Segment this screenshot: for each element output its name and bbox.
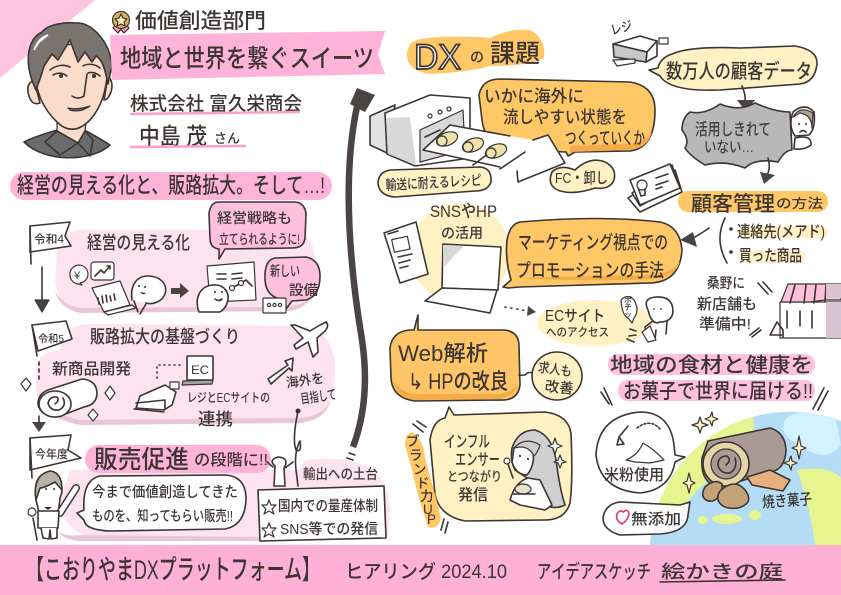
text: new store: 準備中! <box>699 316 751 333</box>
heading pill: DX <box>407 30 544 77</box>
icon: oven <box>370 95 470 166</box>
arrow: overseas <box>268 358 293 384</box>
flag <box>32 321 72 356</box>
icon: yen bubble <box>70 265 88 285</box>
label: FC: FC・卸し <box>555 170 608 187</box>
bubble: additive free <box>603 502 690 535</box>
list: customer management: 連絡先(メアド) <box>737 223 825 241</box>
cloud: not utilized <box>682 103 792 168</box>
figure: person with board <box>197 285 228 312</box>
callout: web analytics: Web解析 <box>398 341 488 366</box>
callout: influencer: 発信 <box>458 486 488 504</box>
company name: 株式会社 富久栄商会 <box>130 93 302 115</box>
bubble: click: ポチッ <box>624 296 632 319</box>
flag <box>30 222 71 264</box>
icon: laptop <box>425 244 501 313</box>
arrow: big curved <box>347 88 375 460</box>
label: brand power: ブランド力UP <box>406 433 436 527</box>
panel: 令和5 <box>21 321 337 429</box>
heading pill: DX: DX <box>414 38 461 77</box>
flag: 令和5 <box>38 332 64 345</box>
callout: strategy: 経営戦略も <box>217 210 292 226</box>
label: recruitment: 改善 <box>544 378 575 398</box>
caption: 連携 <box>198 410 233 429</box>
label: FC <box>550 160 615 192</box>
text: new store: 桑野に <box>707 275 745 291</box>
dotted arrow <box>505 306 536 316</box>
label: recipe <box>378 167 491 197</box>
icon: message box <box>263 298 286 313</box>
sparkles <box>21 378 115 421</box>
list: customer management <box>720 218 828 265</box>
caption: SNS: SNSやHP <box>430 202 497 221</box>
box: export foundation: SNS等での発信 <box>280 520 378 538</box>
callout: overseas distribution: いかに海外に <box>484 87 584 106</box>
label: EC access: へのアクセス <box>546 326 609 339</box>
panel: 今年度 <box>58 459 390 541</box>
footer band: ヒアリング 2024.10 <box>345 561 507 583</box>
heading pill: DX: の <box>470 49 484 65</box>
icon: strategy board <box>207 262 256 302</box>
callout: strategy <box>209 202 306 259</box>
caption: 目指して <box>300 387 337 407</box>
heading: local ingredients <box>601 354 828 410</box>
callout: sales <box>77 475 246 531</box>
callout: marketing: プロモーションの手法 <box>516 260 664 281</box>
label: EC access <box>537 300 653 346</box>
icon: register top: レジ <box>609 18 634 38</box>
flag: 令和4 <box>34 232 65 246</box>
callout: influencer: インフル <box>444 434 490 451</box>
callout: equipment <box>265 257 320 309</box>
label: 新商品開発 <box>52 360 131 378</box>
callout: web analytics <box>390 315 520 401</box>
background: SNS circle <box>410 203 510 303</box>
icon: roll cake <box>38 379 97 417</box>
bubble: rice flour <box>596 412 685 493</box>
icon: register <box>134 382 179 412</box>
arrow <box>32 416 46 432</box>
person name <box>130 123 246 149</box>
figure: influencer <box>504 430 566 510</box>
person name: さん <box>214 131 240 146</box>
heading pill: customer management <box>678 191 828 216</box>
heading pill: 販売促進: の段階に!! <box>194 451 268 469</box>
flag <box>30 435 81 478</box>
callout: equipment: 設備 <box>289 282 318 298</box>
callout: equipment: 新しい <box>270 263 300 279</box>
conveyor arrow <box>423 125 565 182</box>
callout: overseas distribution: つくっていくか <box>565 129 645 148</box>
figure: cheering person <box>267 457 293 486</box>
text: new store: 新店舗も <box>697 296 757 313</box>
bubble: rice flour: 米粉使用 <box>604 466 664 484</box>
footer band <box>0 545 841 595</box>
callout: overseas distribution: 流しやすい状態を <box>503 108 627 127</box>
dotted link <box>157 365 181 378</box>
label: recruitment: 求人も <box>537 360 573 379</box>
label: EC access: ECサイト <box>545 308 605 325</box>
icon: growth chart <box>91 262 114 280</box>
icon: customer cards <box>628 164 682 212</box>
callout: influencer: エンサー <box>455 452 500 469</box>
corner decoration <box>0 0 95 78</box>
heading pill: 経営の見える化: 経営の見える化と、販路拡大。そして…! <box>17 173 325 198</box>
text: new store <box>697 275 772 337</box>
label: 輸出への土台 <box>303 466 378 482</box>
icon: airplane <box>291 322 328 357</box>
medal icon <box>112 12 130 33</box>
label: baked sweets: 焼き菓子 <box>761 490 813 512</box>
callout: customer data: 数万人の顧客データ <box>666 59 812 83</box>
label: recipe: 輸送に耐えるレシピ <box>385 172 482 193</box>
figure: person with phone <box>627 297 673 342</box>
heading pill: DX: 課題 <box>490 40 540 68</box>
globe <box>640 411 841 545</box>
arrow <box>737 86 755 112</box>
person name: 中島 茂 <box>139 123 207 149</box>
icon: EC laptop: EC <box>191 363 209 377</box>
heading: local ingredients: お菓子で世界に届ける!! <box>623 380 813 403</box>
callout: strategy: 立てられるように! <box>219 232 300 247</box>
connector line <box>294 411 300 486</box>
department heading: 価値創造部門 <box>135 10 266 33</box>
arrow <box>35 267 49 312</box>
callout: influencer: とつながり <box>447 469 502 484</box>
cloud: not utilized: いない… <box>704 139 754 156</box>
figure: presenter <box>28 471 76 540</box>
sparkles <box>683 412 806 493</box>
footer band: アイデアスケッチ <box>537 560 651 583</box>
icon: EC laptop <box>182 356 213 385</box>
callout: overseas distribution <box>479 79 655 156</box>
icon: baked sweets <box>702 428 790 508</box>
caption <box>187 391 270 429</box>
callout: sales: 今まで価値創造してきた <box>92 484 238 501</box>
caption: 海外を <box>285 369 325 391</box>
icon: register top <box>609 18 668 66</box>
callout: marketing <box>503 218 682 288</box>
callout: web analytics: ↳ HPの改良 <box>408 369 508 394</box>
heading: local ingredients: 地域の食材と健康を <box>610 354 813 377</box>
heading pill: customer management: 顧客管理 <box>691 193 775 216</box>
bubble: additive free: 無添加 <box>631 511 681 528</box>
figure: person at laptop <box>132 276 166 314</box>
figure: worried person <box>791 107 814 149</box>
callout: customer data <box>649 46 817 90</box>
caption: レジとECサイトの <box>187 391 270 405</box>
heading pill: 販売促進: 販売促進 <box>94 446 189 474</box>
box: export foundation: 国内での量産体制 <box>278 498 378 515</box>
icon: laptop <box>92 281 136 315</box>
cloud: not utilized: 活用しきれて <box>695 120 771 139</box>
panel: 令和4 <box>30 202 320 315</box>
heading pill: customer management: の方法 <box>776 196 823 211</box>
portrait <box>24 23 112 158</box>
caption: SNS <box>430 202 497 241</box>
caption: SNS: の活用 <box>441 225 483 241</box>
icon: shop <box>770 284 841 338</box>
dotted connector <box>38 362 40 382</box>
callout: influencer <box>430 407 572 521</box>
caption <box>285 368 337 408</box>
title ribbon <box>110 31 385 80</box>
sub heading: 販路拡大の基盤づくり <box>90 327 240 347</box>
icon: yen bubble: ¥ <box>73 270 81 282</box>
flag: 今年度 <box>35 447 68 461</box>
footer band: 絵かきの庭 <box>661 562 783 582</box>
title ribbon: 地域と世界を繋ぐスイーツ <box>120 45 374 73</box>
label: recruitment <box>532 352 582 400</box>
callout: marketing: マーケティング視点での <box>518 232 668 253</box>
callout: sales: ものを、知ってもらい販売!! <box>92 508 233 525</box>
label: brand power <box>405 421 448 533</box>
connector <box>519 372 534 375</box>
box: export foundation <box>258 486 386 541</box>
list: customer management: 買った商品 <box>739 247 802 265</box>
sub heading: 経営の見える化 <box>87 233 190 253</box>
icon: phone <box>384 222 428 283</box>
footer band: 【こおりやまDXプラットフォーム】 <box>26 555 320 585</box>
arrow <box>680 228 709 247</box>
arrow <box>171 283 189 298</box>
heading pill: 販売促進 <box>85 445 271 474</box>
arrow <box>760 158 775 184</box>
bubble: click <box>621 296 637 323</box>
